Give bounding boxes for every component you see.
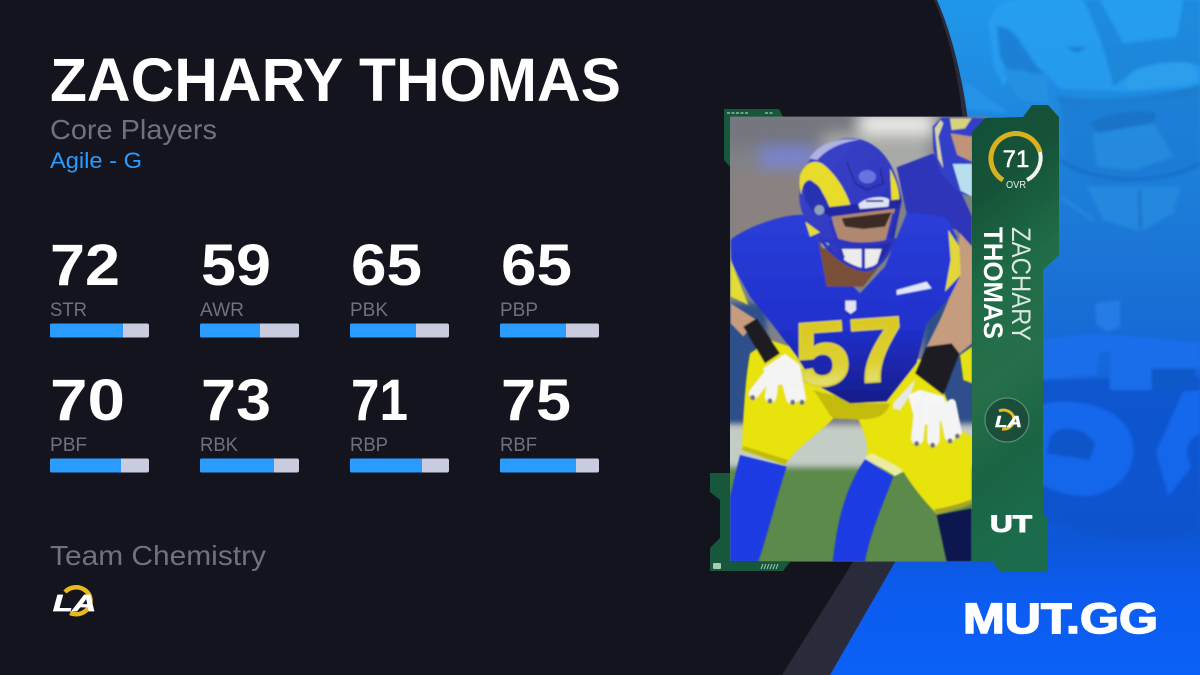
pants <box>730 340 972 562</box>
grey curved band <box>782 0 1000 675</box>
stat: PBP <box>500 233 599 338</box>
icon: card team badge: LA <box>995 414 1022 431</box>
stat: PBF: 70 <box>50 368 125 433</box>
jersey <box>731 213 960 403</box>
card corner: top left <box>724 109 783 168</box>
stat: AWR: AWR <box>200 300 244 321</box>
stat: STR: 72 <box>50 233 120 298</box>
card green side panel <box>972 105 1059 572</box>
stat: PBK: PBK <box>350 300 388 321</box>
card UT label: UT <box>990 511 1032 538</box>
overall rating gauge <box>991 134 1041 191</box>
arms <box>950 233 972 303</box>
stat: PBP: PBP <box>500 300 538 321</box>
ghosted player image <box>963 0 1200 539</box>
stat: STR <box>50 233 149 338</box>
second player <box>897 153 972 247</box>
stat: AWR <box>200 233 299 338</box>
stat: RBK: RBK <box>200 435 238 456</box>
overall rating gauge: OVR <box>1006 180 1026 191</box>
wristbands and gloves <box>743 318 780 363</box>
card first name: ZACHARY <box>1006 227 1036 341</box>
icon: Rams logo <box>53 587 96 616</box>
icon: Rams logo: LA <box>53 590 96 616</box>
MUT.GG wordmark: MUT.GG <box>963 595 1158 643</box>
stat: PBF <box>50 368 149 472</box>
stat: PBP: 65 <box>501 233 572 298</box>
blue curved panel <box>830 0 1200 675</box>
stat: PBF: PBF <box>50 435 87 456</box>
player photo: 57 <box>791 298 908 407</box>
card last name: THOMAS <box>978 227 1008 339</box>
stat: RBP: RBP <box>350 435 388 456</box>
stat: RBF <box>500 368 599 472</box>
overall rating gauge: 71 <box>1003 146 1029 173</box>
stat: STR: STR <box>50 300 87 321</box>
stat: RBK <box>200 368 299 472</box>
stat: RBK: 73 <box>201 368 271 433</box>
stat: RBP <box>350 368 449 472</box>
helmet <box>799 138 902 270</box>
player card <box>710 105 1059 572</box>
team chemistry heading: Team Chemistry <box>50 540 266 571</box>
legs <box>730 455 787 562</box>
stat: AWR: 59 <box>201 233 271 298</box>
neck <box>818 240 879 288</box>
stat: RBP: 71 <box>351 368 408 433</box>
player photo <box>730 116 987 562</box>
stat: RBF: 75 <box>501 368 571 433</box>
stat: RBF: RBF <box>500 435 537 456</box>
stat: PBK <box>350 233 449 338</box>
icon: card team badge <box>985 398 1029 442</box>
card corner: bottom left <box>710 473 790 571</box>
title: ZACHARY THOMAS <box>50 46 621 114</box>
stat: PBK: 65 <box>351 233 422 298</box>
subtitle: archetype and position: Agile - G <box>50 148 142 173</box>
subtitle: program: Core Players <box>50 114 217 145</box>
